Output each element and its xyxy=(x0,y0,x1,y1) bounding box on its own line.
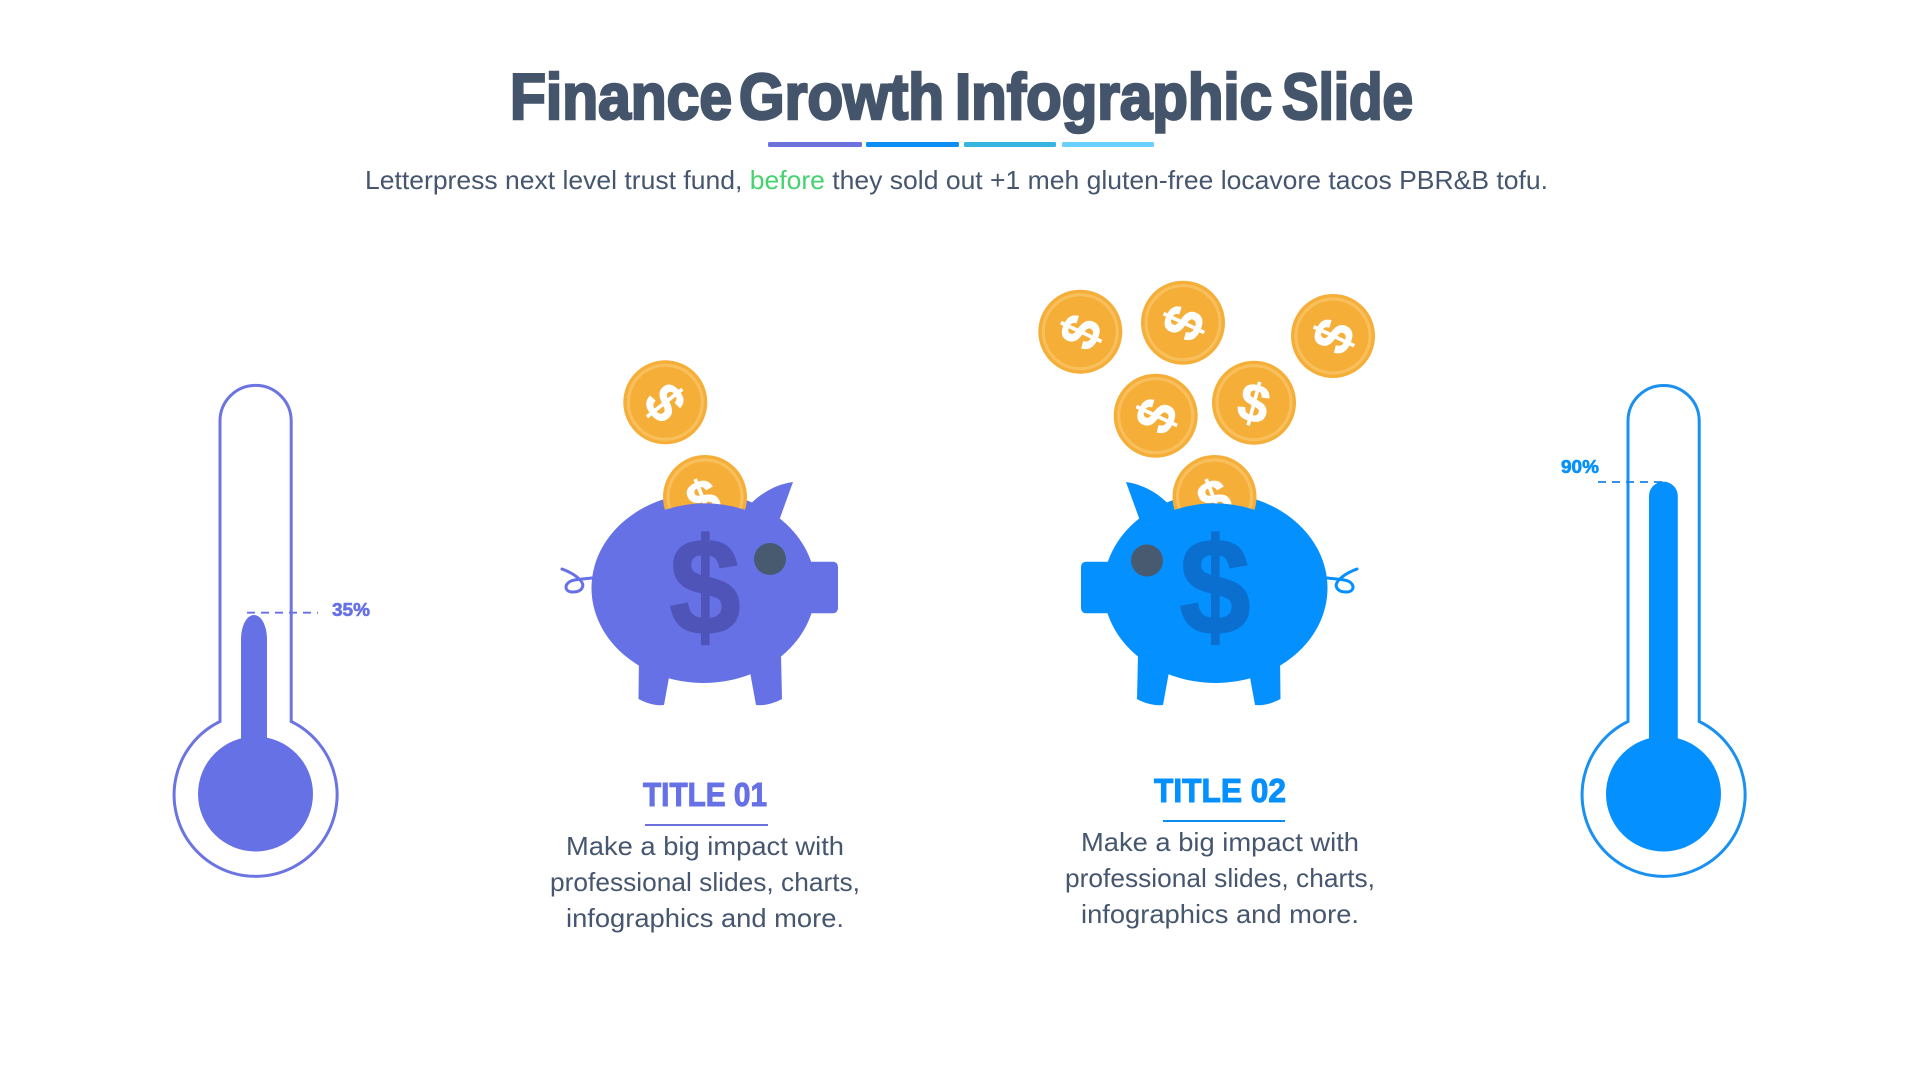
label: 90%: 90% xyxy=(1561,457,1599,477)
piggy bank: purple xyxy=(562,482,838,705)
title: Infographic xyxy=(955,60,1272,133)
text block: title 02: TITLE 02 xyxy=(1154,772,1286,809)
text block: title 02: Make a big impact with xyxy=(1081,827,1359,857)
text block: title 01 xyxy=(550,776,860,933)
coins: falling above blue pig: $ xyxy=(1048,306,1115,358)
title: Finance xyxy=(510,60,732,133)
coin: in blue pig slot xyxy=(1172,455,1256,510)
title: Slide xyxy=(1282,60,1413,133)
dollar sign: purple pig: $ xyxy=(670,511,740,664)
title underline bars xyxy=(768,142,1154,147)
icon: tail xyxy=(562,569,592,592)
label: 35%: 35% xyxy=(332,600,370,620)
coins: falling above blue pig: $ xyxy=(1231,371,1276,437)
coins: falling above blue pig xyxy=(1038,281,1375,458)
piggy bank: blue xyxy=(1081,482,1357,705)
text block: title 01: TITLE 01 xyxy=(643,776,767,813)
text block: title 02: professional slides, charts, xyxy=(1065,863,1375,893)
thermometer: 35% xyxy=(174,385,370,876)
text block: title 01: professional slides, charts, xyxy=(550,867,860,897)
subtitle: Letterpress next level trust fund, before they sold out +1 meh gluten-free locavore tacos PBR&B tofu. xyxy=(365,165,1548,195)
coin: in purple pig slot xyxy=(663,455,747,510)
coin: in blue pig slot: $ xyxy=(1189,466,1240,533)
thermometer: 90% xyxy=(1561,385,1745,876)
text block: title 01: infographics and more. xyxy=(566,903,844,933)
title xyxy=(510,60,1413,133)
title: Growth xyxy=(739,60,944,133)
coin: falling above purple pig: $ xyxy=(632,373,697,433)
text block: title 02 xyxy=(1065,772,1375,929)
coins: falling above blue pig: $ xyxy=(1123,390,1190,442)
coin: in purple pig slot: $ xyxy=(678,466,729,533)
text block: title 01: Make a big impact with xyxy=(566,831,844,861)
dollar sign: blue pig: $ xyxy=(1180,511,1250,664)
coins: falling above blue pig: $ xyxy=(1150,297,1217,349)
coin: falling above purple pig xyxy=(623,360,707,444)
text block: title 02: infographics and more. xyxy=(1081,899,1359,929)
coins: falling above blue pig: $ xyxy=(1300,310,1367,363)
